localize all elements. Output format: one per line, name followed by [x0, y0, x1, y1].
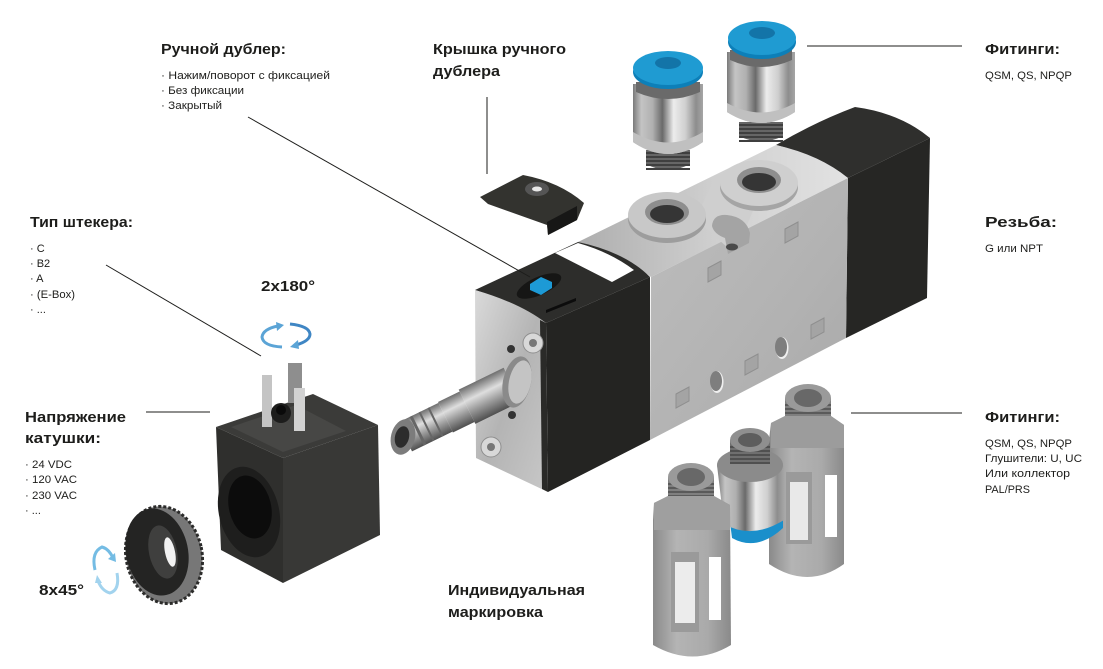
- side holes and port markings: [676, 222, 824, 408]
- text: coil voltage: · 230 VAC: [25, 490, 77, 502]
- text: plug type: · C: [30, 243, 45, 255]
- text: plug type: · ...: [30, 304, 46, 316]
- text: manual override: · Без фиксации: [161, 85, 244, 97]
- text: override cover: Крышка ручного: [433, 41, 566, 58]
- text: rotation 8x45: 8x45°: [39, 582, 84, 599]
- text: fittings top: QSM, QS, NPQP: [985, 70, 1072, 82]
- text: coil voltage: катушки:: [25, 430, 101, 447]
- text: fittings top: Фитинги:: [985, 41, 1060, 58]
- text: plug type: Тип штекера:: [30, 214, 133, 231]
- text: fittings bottom: [985, 409, 1082, 496]
- text: individual marking: [448, 582, 585, 621]
- solenoid stem: [387, 354, 536, 457]
- text: coil voltage: Напряжение: [25, 409, 126, 426]
- text: individual marking: Индивидуальная: [448, 582, 585, 599]
- solenoid coil: [209, 363, 380, 583]
- text: fittings bottom: Глушители: U, UC: [985, 453, 1082, 465]
- text: plug type: · B2: [30, 258, 50, 270]
- leader lines: [106, 46, 962, 413]
- silencer: right: [769, 384, 844, 577]
- fitting: top left: [633, 51, 703, 170]
- text: coil voltage: · ...: [25, 505, 41, 517]
- silencer: left: [653, 463, 731, 656]
- text: plug type: · (E-Box): [30, 289, 75, 301]
- manual override button: [513, 268, 576, 313]
- plug pins: [262, 363, 305, 431]
- aluminium body: [578, 145, 848, 440]
- rotation arrows: 8x45: [94, 547, 118, 593]
- right end cap: [776, 107, 930, 338]
- text: plug type: · A: [30, 273, 44, 285]
- text: fittings bottom: Фитинги:: [985, 409, 1060, 426]
- text: override cover: дублера: [433, 63, 501, 80]
- knurled nut: [117, 499, 211, 611]
- text: manual override: · Закрытый: [161, 100, 222, 112]
- screws on front plate: [481, 333, 543, 457]
- text: override cover: [433, 41, 566, 80]
- valve body: [387, 107, 930, 492]
- text: fittings top: [985, 41, 1072, 82]
- rotation arrows: 2x180: [262, 322, 310, 349]
- text: thread: Резьба:: [985, 214, 1057, 231]
- text: thread: G или NPT: [985, 243, 1043, 255]
- text: plug type: [30, 214, 133, 316]
- text: manual override: · Нажим/поворот с фиксацией: [161, 70, 330, 82]
- text: thread: [985, 214, 1057, 255]
- text: fittings bottom: PAL/PRS: [985, 484, 1030, 496]
- manual override cover: [480, 175, 584, 235]
- text: rotation 2x180: 2x180°: [261, 278, 315, 295]
- text: fittings bottom: QSM, QS, NPQP: [985, 438, 1072, 450]
- ports on body top: [628, 160, 798, 243]
- text: manual override: [161, 41, 330, 112]
- text: manual override: Ручной дублер:: [161, 41, 286, 58]
- text: coil voltage: · 120 VAC: [25, 474, 77, 486]
- marking label window: [555, 243, 634, 282]
- text: coil voltage: · 24 VDC: [25, 459, 72, 471]
- fitting: middle with blue ring: [717, 428, 784, 543]
- left black housing: [475, 242, 650, 492]
- text: individual marking: маркировка: [448, 604, 544, 621]
- text: fittings bottom: Или коллектор: [985, 468, 1070, 480]
- text: coil voltage: [25, 409, 126, 517]
- fitting: top right: [727, 21, 796, 142]
